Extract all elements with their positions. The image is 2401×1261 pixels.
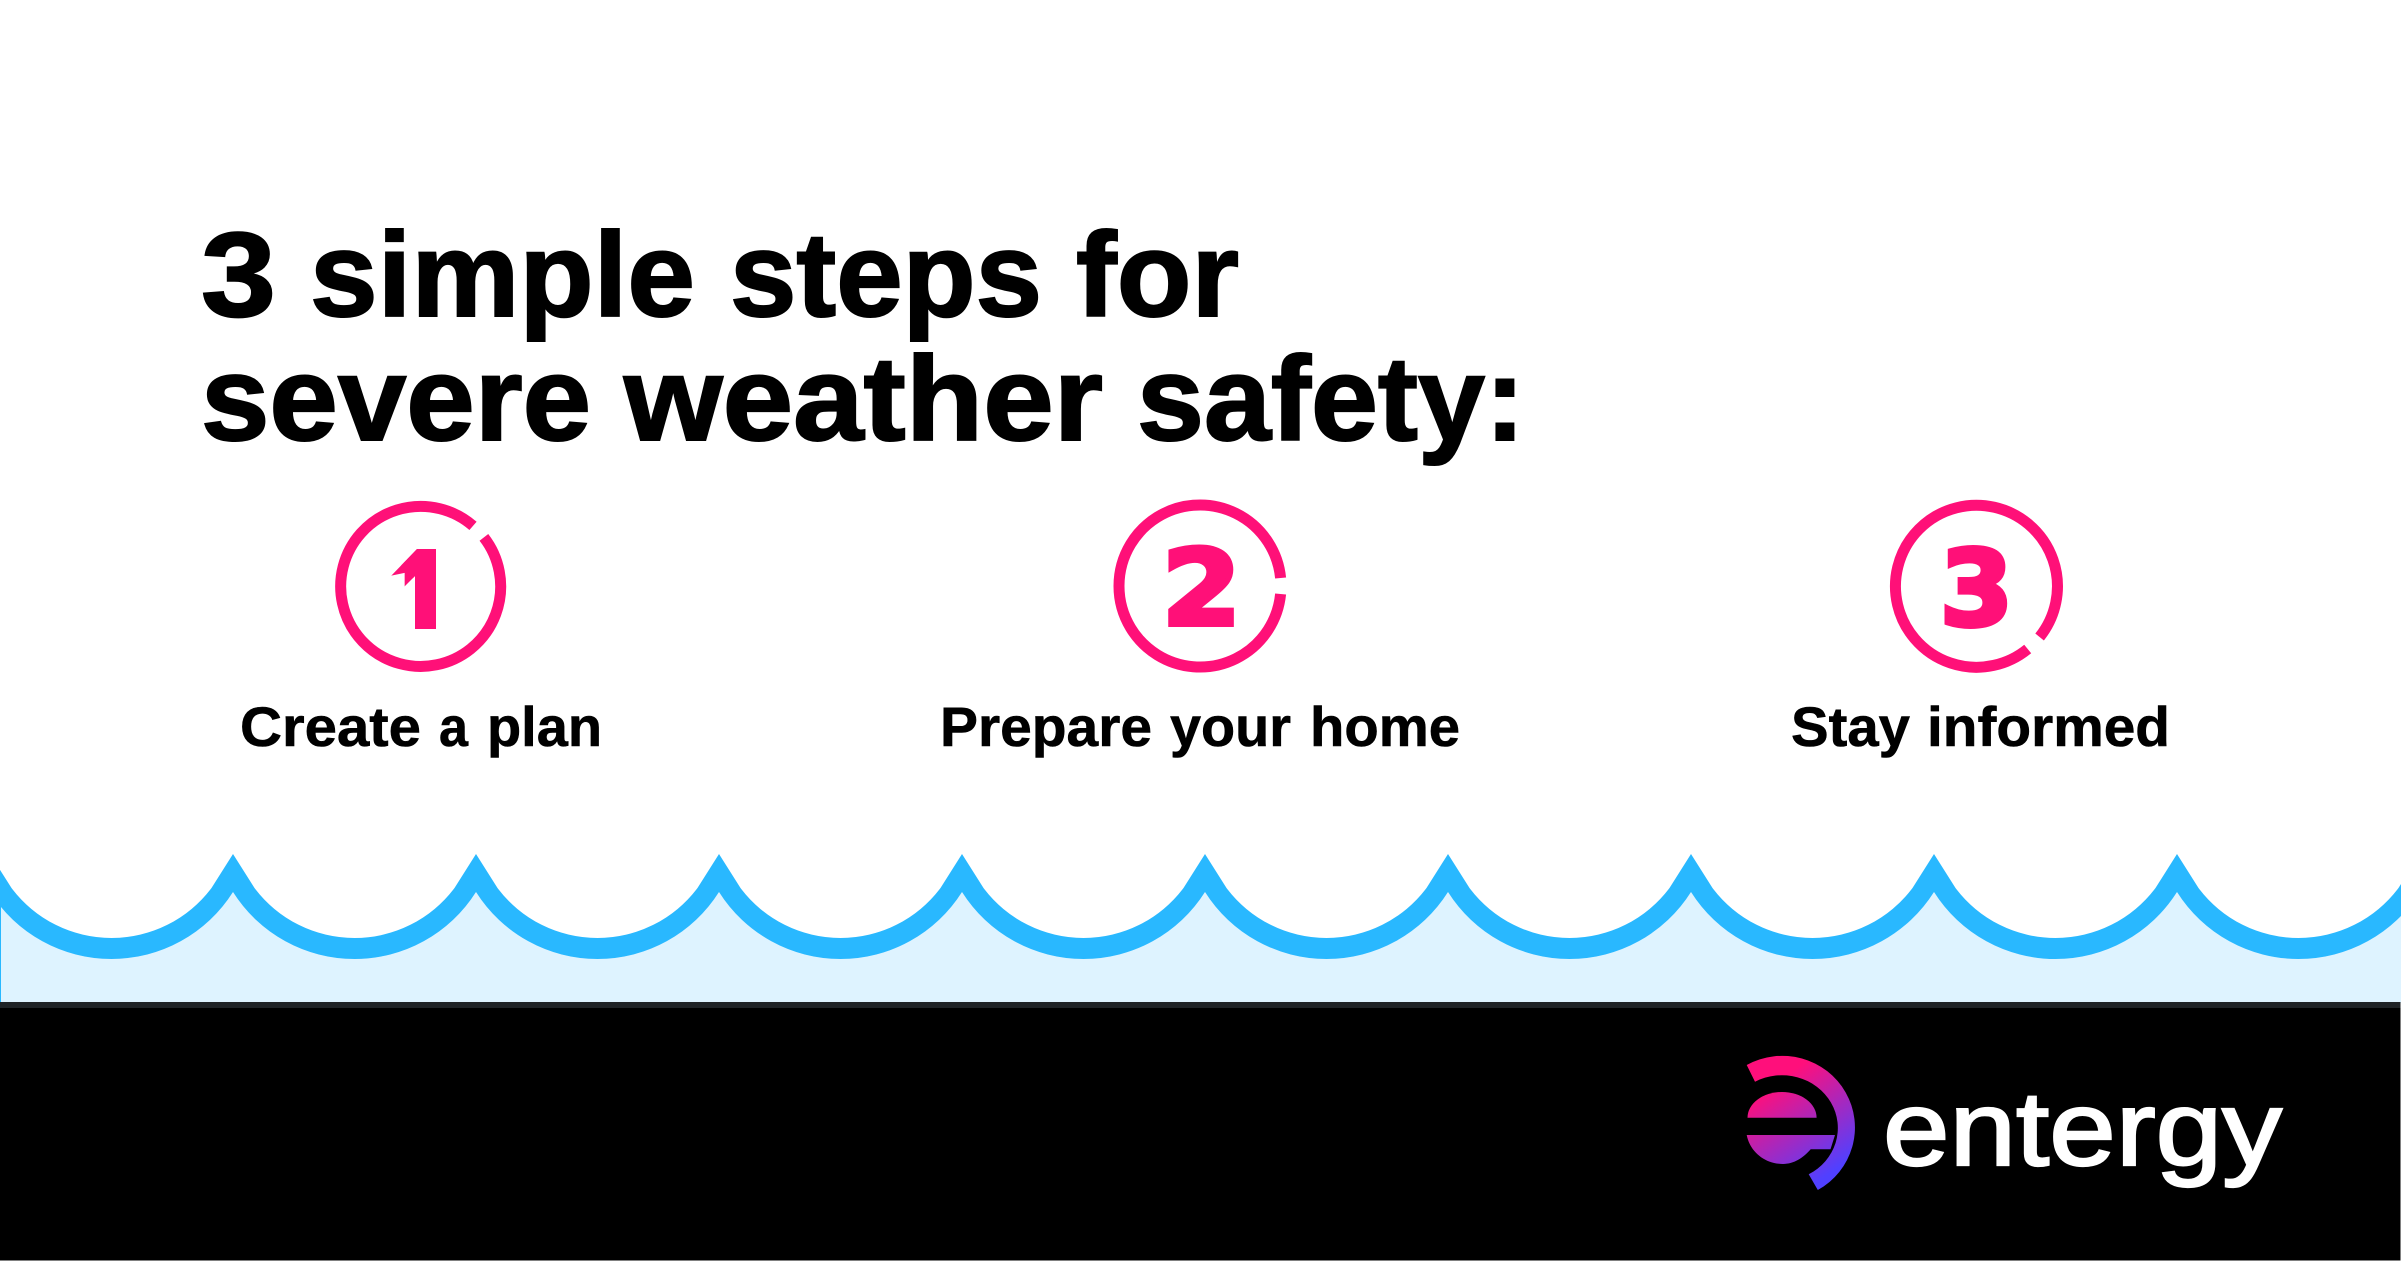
wordmark: entergy xyxy=(1883,1070,2282,1188)
label: prepare your home xyxy=(940,695,1460,758)
footer band xyxy=(0,1002,2400,1260)
label: create a plan: Create xyxy=(240,695,421,758)
title: steps xyxy=(730,208,1042,342)
title: severe xyxy=(201,332,591,466)
logo: entergy xyxy=(1747,1056,2282,1190)
icon: numbered circle 2: 2 xyxy=(1162,528,1241,650)
title: 3 xyxy=(201,208,276,342)
label: stay informed: Stay xyxy=(1791,695,1910,758)
icon: numbered circle 3: 3 xyxy=(1940,528,2013,650)
step 2: prepare your home xyxy=(940,505,1460,758)
label: prepare your home: your xyxy=(1170,695,1291,758)
icon: entergy mark xyxy=(1747,1056,1855,1190)
water waves xyxy=(0,854,2401,1003)
icon: numbered circle 3 xyxy=(1895,505,2057,667)
label: prepare your home: Prepare xyxy=(940,695,1152,758)
label: create a plan: a xyxy=(439,695,469,758)
icon: numbered circle 1: 1 xyxy=(382,527,458,655)
title: for xyxy=(1076,208,1239,342)
icon: numbered circle 2 xyxy=(1119,505,1281,667)
step 1: create a plan xyxy=(240,506,602,758)
title: weather xyxy=(623,332,1103,466)
title: simple xyxy=(310,208,695,342)
label: create a plan xyxy=(240,695,602,758)
label: create a plan: plan xyxy=(487,695,602,758)
label: stay informed: informed xyxy=(1927,695,2170,758)
label: prepare your home: home xyxy=(1310,695,1460,758)
title: safety: xyxy=(1137,332,1525,466)
title xyxy=(201,208,1525,466)
step 3: stay informed xyxy=(1791,505,2170,758)
icon: numbered circle 1 xyxy=(341,506,501,666)
label: stay informed xyxy=(1791,695,2170,758)
